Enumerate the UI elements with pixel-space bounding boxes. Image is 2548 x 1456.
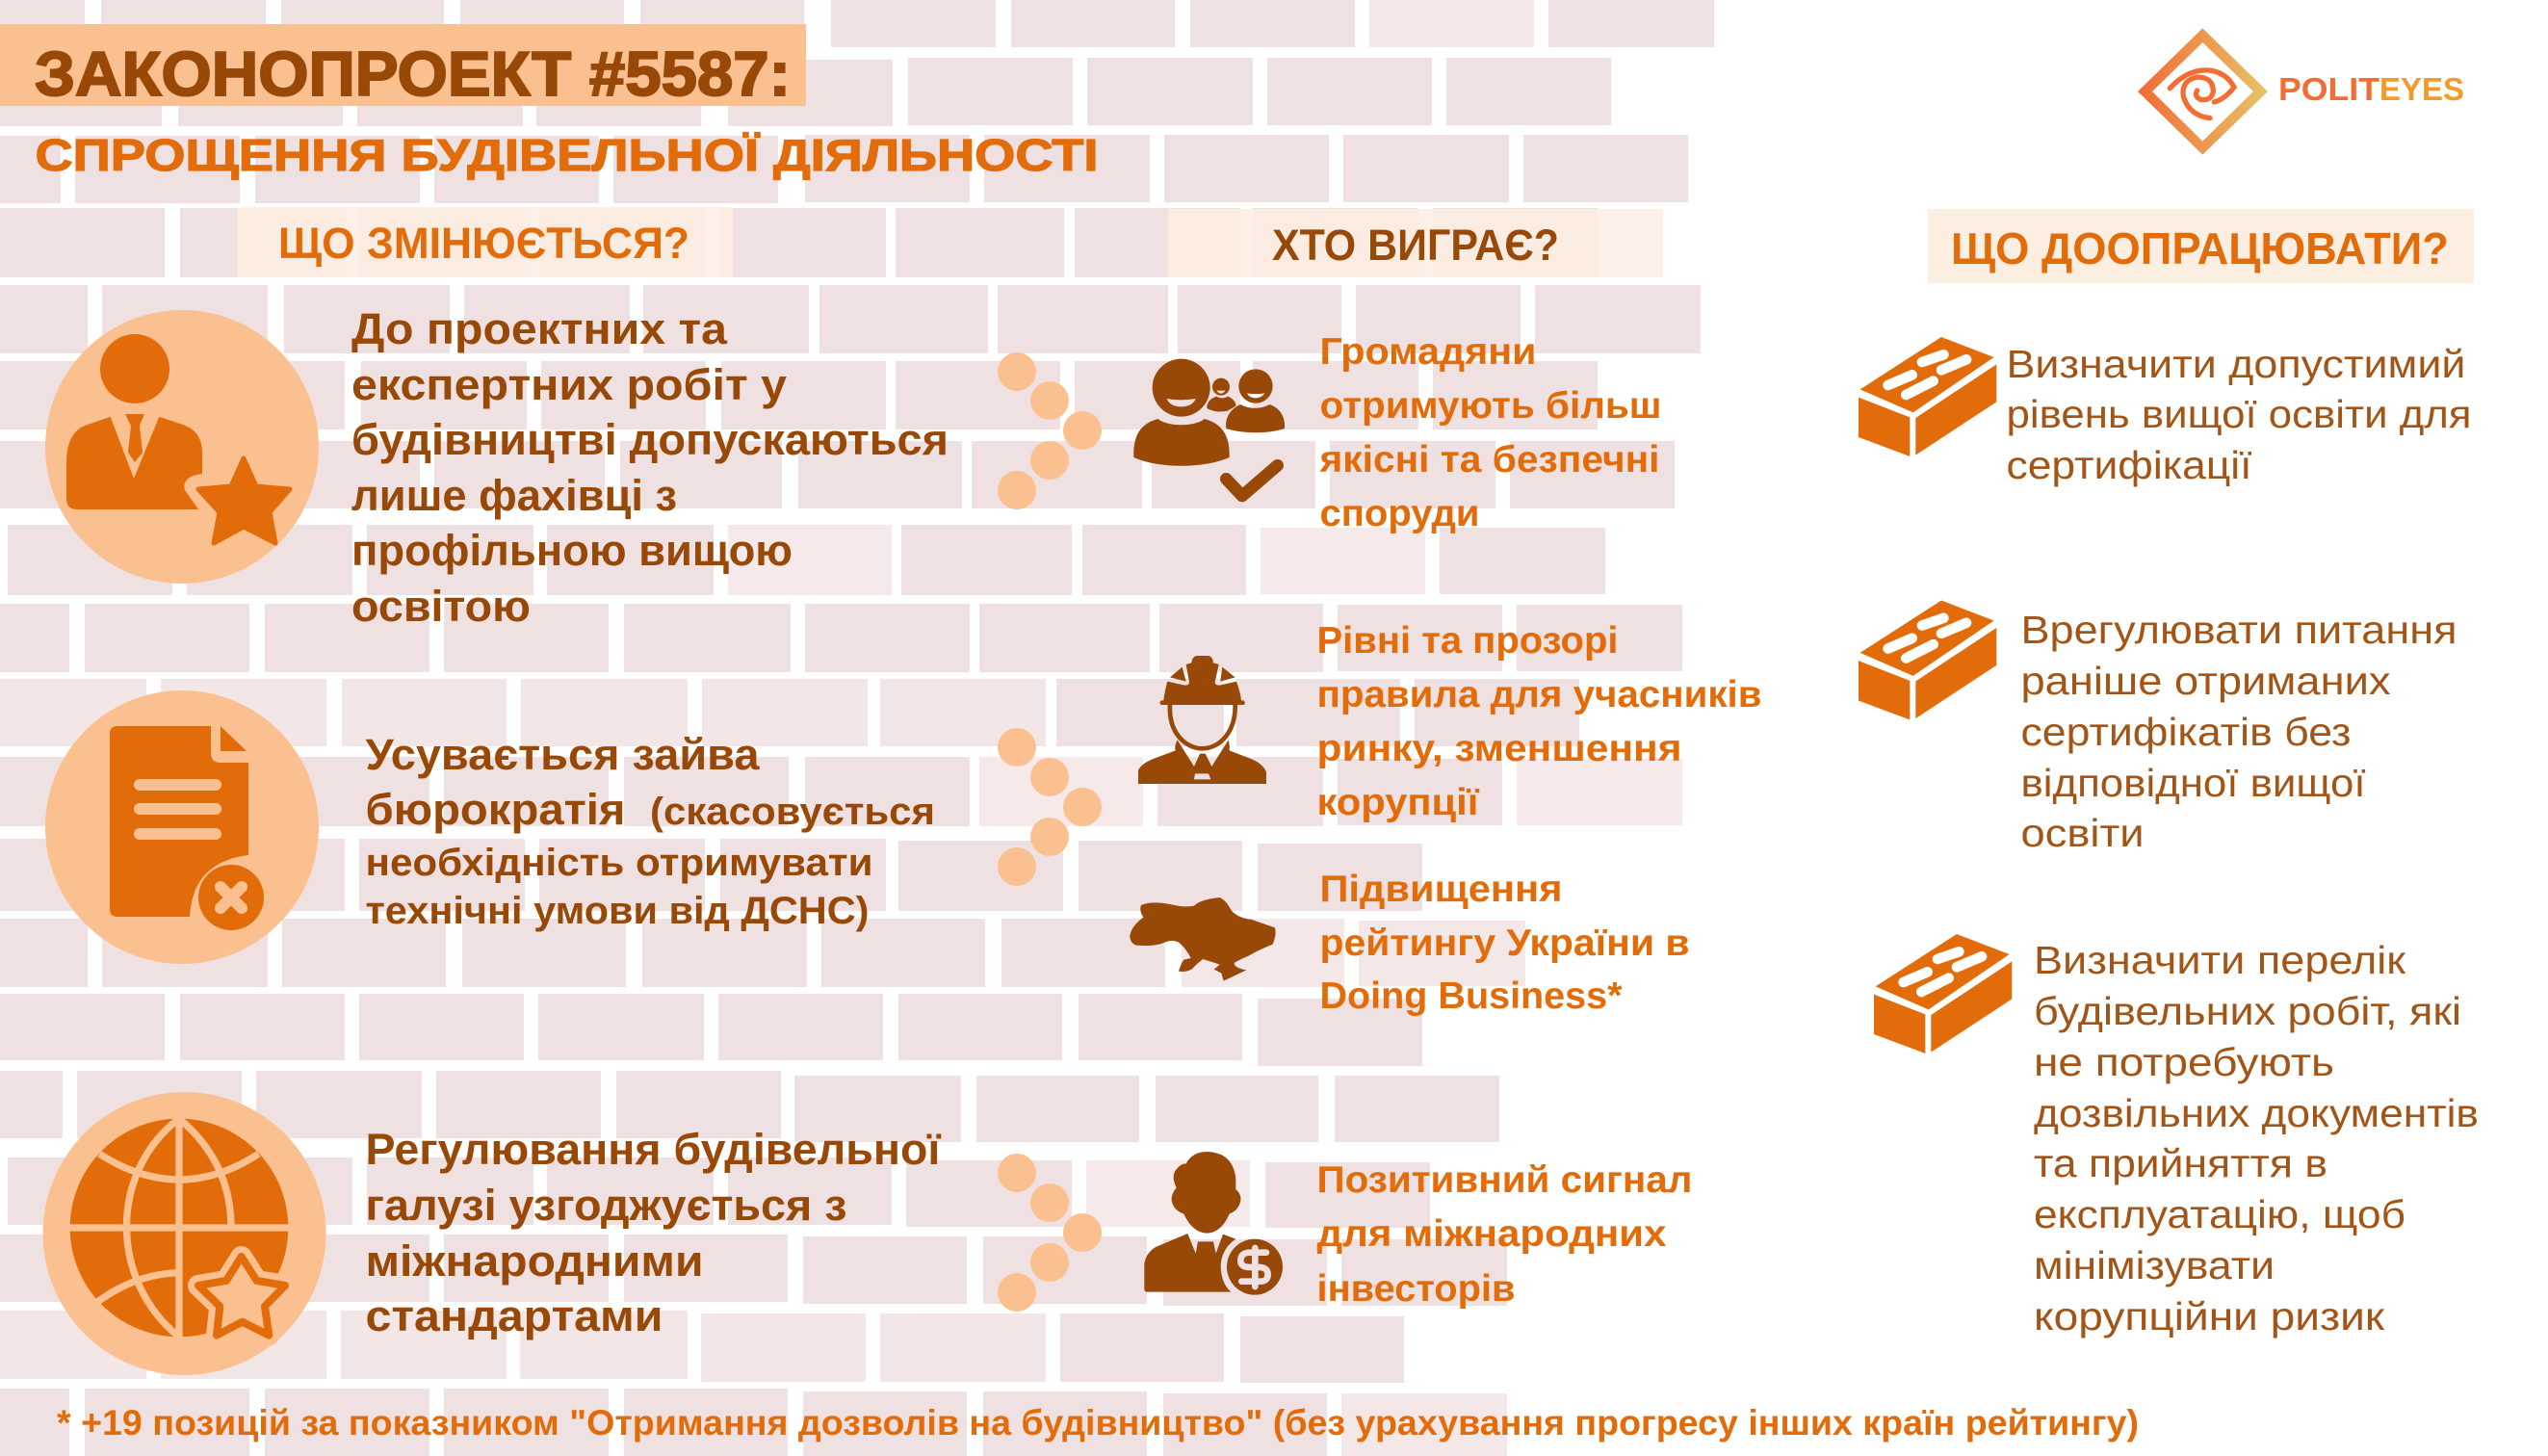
icon: brick 1 <box>1859 337 1996 456</box>
text: bureaucracy: (скасовується <box>650 791 935 833</box>
text: transparent rules: правила для учасників <box>1317 674 1762 715</box>
text: citizens: отримують більш <box>1319 385 1662 427</box>
text: list of works: будівельних робіт, які <box>2034 989 2461 1033</box>
column heading: what changes: ЩО ЗМІНЮЄТЬСЯ? <box>278 219 689 268</box>
text: list of works: та прийняття в <box>2034 1141 2327 1185</box>
text: investors: Позитивний сигнал <box>1317 1159 1693 1201</box>
icon: map of Ukraine <box>1130 897 1276 981</box>
text: transparent rules <box>1317 620 1762 823</box>
text: transparent rules: Рівні та прозорі <box>1317 620 1618 662</box>
text: rating: Підвищення <box>1319 869 1562 910</box>
text: citizens: споруди <box>1319 493 1479 534</box>
text: bureaucracy: бюрократія <box>366 785 626 834</box>
text: standards <box>366 1125 942 1340</box>
text: investors <box>1317 1159 1693 1310</box>
text: standards: Регулювання будівельної <box>366 1125 942 1174</box>
text: specialists: освітою <box>351 582 531 631</box>
connector dots 1 <box>998 352 1102 509</box>
text: specialists <box>351 304 949 631</box>
logo: PolitEyes: EYES <box>2379 71 2464 107</box>
text: rating: Doing Business* <box>1319 975 1623 1017</box>
icon: document with cross <box>45 690 319 964</box>
text: bureaucracy: Усувається зайва <box>366 730 761 779</box>
text: specialists: лише фахівці з <box>351 471 677 520</box>
text: certificates: сертифікатів без <box>2020 710 2352 754</box>
text: transparent rules: корупції <box>1317 782 1480 823</box>
text: citizens: якісні та безпечні <box>1318 439 1660 481</box>
icon: investor with dollar <box>1144 1152 1283 1295</box>
text: certificates <box>2020 608 2457 855</box>
logo: PolitEyes <box>2138 28 2464 155</box>
text: bureaucracy: необхідність отримувати <box>366 842 872 884</box>
text: rating <box>1319 869 1689 1017</box>
text: list of works: мінімізувати <box>2034 1243 2275 1287</box>
subtitle: СПРОЩЕННЯ БУДІВЕЛЬНОЇ ДІЯЛЬНОСТІ <box>35 130 1098 180</box>
text: specialists: експертних робіт у <box>351 360 787 409</box>
text: bureaucracy <box>366 730 935 932</box>
column heading: who wins <box>1168 209 1663 277</box>
text: specialists: До проектних та <box>351 304 728 353</box>
text: certificates: відповідної вищої <box>2020 761 2365 805</box>
text: list of works: корупційни ризик <box>2034 1294 2385 1339</box>
text: standards: галузі узгоджується з <box>366 1181 847 1230</box>
footnote: * +19 позицій за показником "Отримання дозволів на будівництво" (без урахування прогресу інших країн рейтингу) <box>57 1403 2139 1443</box>
title band <box>0 24 806 106</box>
text: investors: інвесторів <box>1317 1268 1516 1310</box>
text: list of works <box>2034 938 2479 1339</box>
text: list of works: експлуатацію, щоб <box>2034 1192 2405 1236</box>
column heading: what changes <box>237 207 733 277</box>
icon: worker in helmet <box>1138 656 1266 784</box>
text: standards: міжнародними <box>366 1236 703 1286</box>
icon: brick 3 <box>1874 934 2012 1053</box>
title: ЗАКОНОПРОЕКТ #5587: <box>35 39 791 109</box>
text: education level: Визначити допустимий <box>2007 342 2465 386</box>
icon: brick 2 <box>1859 600 1996 719</box>
column heading: who wins: ХТО ВИГРАЄ? <box>1272 221 1559 270</box>
text: certificates: раніше отриманих <box>2020 659 2391 703</box>
text: transparent rules: ринку, зменшення <box>1317 728 1681 769</box>
text: education level <box>2007 342 2471 487</box>
text: bureaucracy: технічні умови від ДСНС) <box>366 890 869 932</box>
connector dots 3 <box>998 1154 1102 1312</box>
text: citizens <box>1318 331 1662 534</box>
text: certificates: Врегулювати питання <box>2020 608 2457 652</box>
text: rating: рейтингу України в <box>1319 923 1689 964</box>
text: education level: сертифікації <box>2007 443 2251 487</box>
text: education level: рівень вищої освіти для <box>2007 392 2471 436</box>
text: citizens: Громадяни <box>1319 331 1537 373</box>
icon: citizens with check <box>1133 359 1285 496</box>
text: standards: стандартами <box>366 1291 663 1340</box>
icon: specialist with star <box>45 310 319 584</box>
connector dots 2 <box>998 728 1102 886</box>
text: certificates: освіти <box>2020 811 2144 855</box>
logo: PolitEyes: POLIT <box>2278 71 2379 107</box>
text: list of works: дозвільних документів <box>2034 1091 2479 1135</box>
text: specialists: будівництві допускаються <box>351 415 949 464</box>
text: investors: для міжнародних <box>1317 1213 1667 1255</box>
text: list of works: не потребують <box>2034 1040 2334 1084</box>
text: list of works: Визначити перелік <box>2034 938 2406 982</box>
column heading: what to improve: ЩО ДООПРАЦЮВАТИ? <box>1951 223 2449 273</box>
icon: globe with star <box>42 1092 325 1375</box>
text: specialists: профільною вищою <box>351 526 793 575</box>
column heading: what to improve <box>1928 209 2474 283</box>
